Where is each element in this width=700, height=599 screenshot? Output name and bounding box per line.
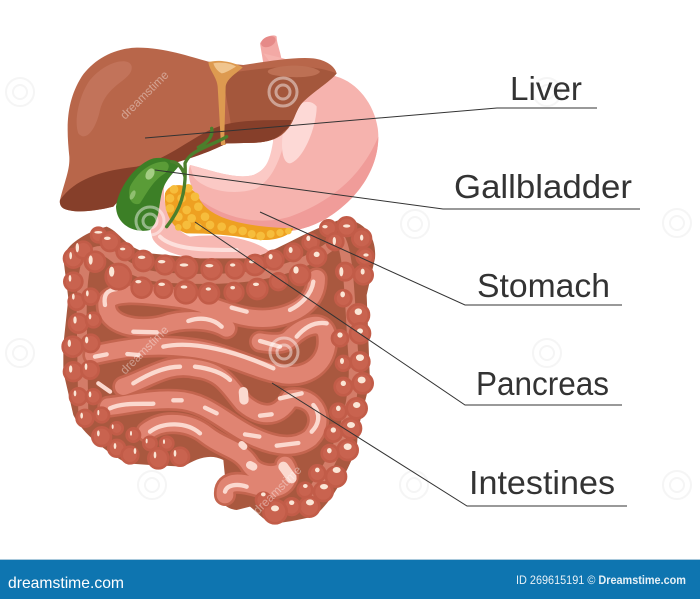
label: Liver: Liver: [510, 70, 582, 107]
intestines: [63, 217, 375, 523]
gallbladder: [116, 128, 227, 231]
small intestine loops: [93, 278, 327, 495]
duodenum: [151, 180, 270, 261]
label: Stomach: Stomach: [477, 267, 610, 304]
watermark spirals: [6, 78, 691, 499]
pancreas: [165, 184, 293, 240]
liver: [60, 48, 337, 211]
tube highlights: [95, 282, 327, 492]
bile ducts: [167, 128, 227, 227]
liver highlights: [77, 61, 132, 136]
watermark text: dreamstime: [117, 68, 172, 122]
label: Gallbladder: Gallbladder: [454, 168, 632, 205]
falciform ligament: [208, 61, 243, 145]
colon band: [82, 238, 354, 495]
liver underside: [60, 120, 292, 211]
colon bumps: [63, 217, 373, 523]
stomach: [60, 34, 378, 261]
label: Intestines: Intestines: [469, 464, 615, 501]
footer bar: [0, 559, 700, 599]
watermark over illustration: [136, 78, 298, 366]
stomach body: [189, 53, 378, 232]
watermark text: [117, 68, 305, 517]
liver right lobe shade: [223, 67, 337, 143]
footer logo: dreamstime.com: [8, 575, 124, 592]
esophagus: [260, 35, 282, 63]
watermark text: dreamstime: [117, 323, 172, 377]
label: Pancreas: Pancreas: [476, 365, 609, 402]
footer id: ID 269615191 © Dreamstime.com: [516, 573, 686, 587]
stomach lower shading: [200, 137, 378, 232]
bump highlights: [68, 224, 369, 511]
watermark text: dreamstime: [250, 463, 305, 517]
intestines silhouette: [63, 218, 375, 523]
leader lines: [145, 108, 640, 506]
